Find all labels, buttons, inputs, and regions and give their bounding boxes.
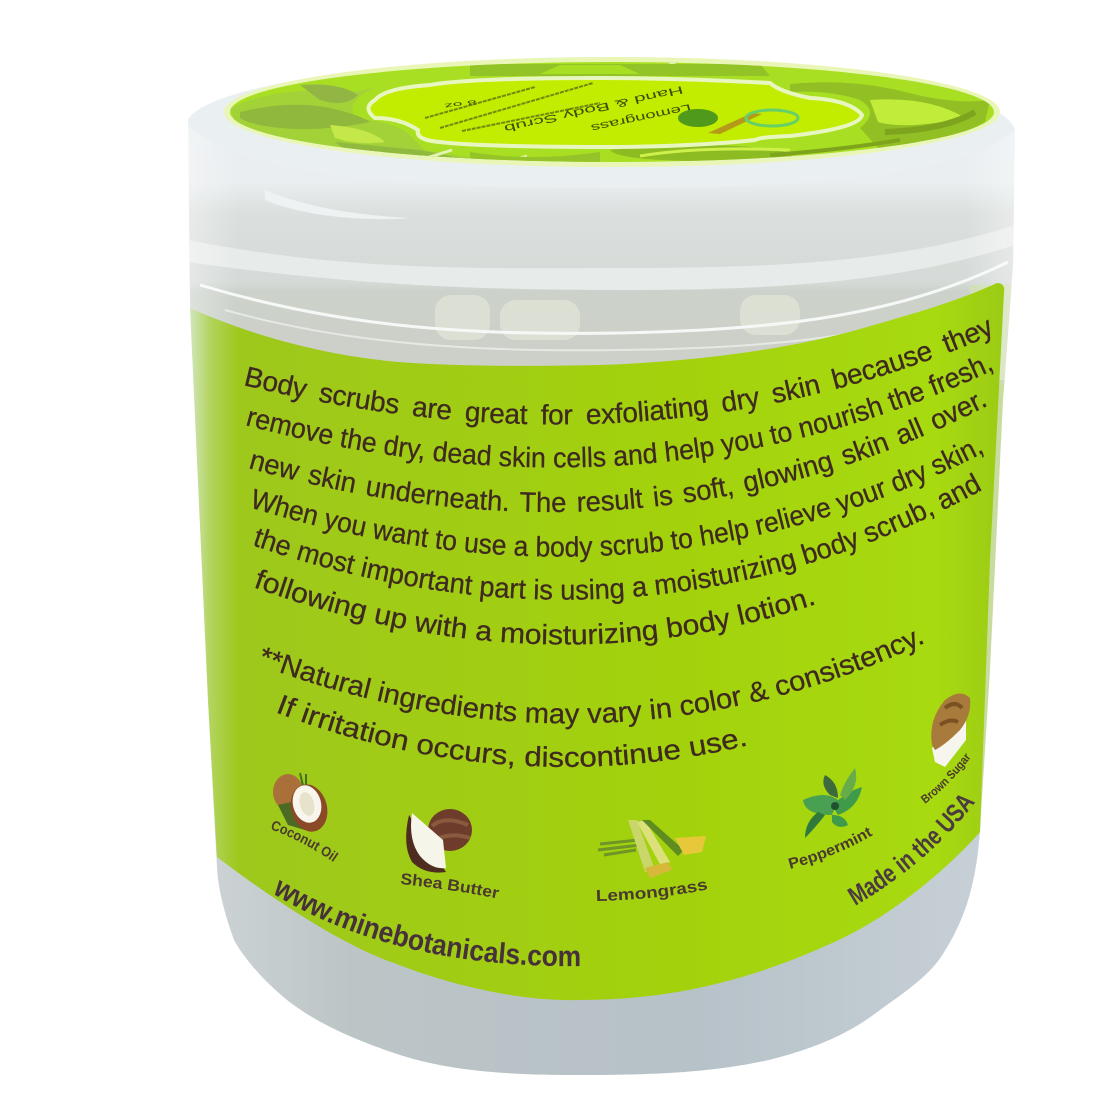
made in the USA: Made in the USA <box>847 795 976 906</box>
lid rim highlight <box>188 57 1015 188</box>
label body copy: When you want to use a body scrub to help relieve your dry skin, <box>254 444 984 562</box>
sticker text upside down: Hand & Body Scrub <box>503 84 685 135</box>
ingredient labels: Brown Sugar <box>920 753 970 804</box>
ingredient labels: Coconut Oil <box>272 821 339 862</box>
back label <box>190 283 1004 1000</box>
icon: shea butter <box>406 809 472 873</box>
jar contents <box>435 295 800 340</box>
label body copy: following up with a moisturizing body lotion. <box>255 570 814 646</box>
sticker logo <box>678 109 798 134</box>
icon: brown sugar <box>931 693 970 767</box>
lid lower step <box>188 225 1015 290</box>
ingredient labels: Lemongrass <box>597 882 707 901</box>
lid sticker <box>224 57 1000 170</box>
sticker centre panel <box>368 78 862 147</box>
sticker text upside down: 8 oz <box>443 99 478 110</box>
icon: peppermint <box>803 768 862 838</box>
label body copy <box>245 320 994 646</box>
label body copy: Body scrubs are great for exfoliating dry skin because they <box>245 320 990 428</box>
ingredient labels <box>272 753 970 901</box>
label body copy: the most important part is using a moisturizing body scrub, and <box>254 472 982 604</box>
icon: coconut <box>273 773 333 836</box>
sticker ornament <box>230 62 990 170</box>
sticker fine print <box>425 83 600 131</box>
ingredient labels: Peppermint <box>788 827 873 869</box>
ingredient labels: Shea Butter <box>400 874 500 898</box>
icon: lemongrass <box>598 820 706 878</box>
label caution note: **Natural ingredients may vary in color & consistency. <box>262 631 924 730</box>
website URL: www.minebotanicals.com <box>275 880 580 966</box>
jar product photo <box>188 57 1015 1075</box>
sticker text upside down: Lemongrass <box>590 102 693 134</box>
label caution note <box>262 631 924 769</box>
label body copy: remove the dry, dead skin cells and help you to nourish the fresh, <box>246 358 994 468</box>
label caution note: If irritation occurs, discontinue use. <box>278 695 746 769</box>
jar body <box>188 126 1015 1075</box>
label body copy: new skin underneath. The result is soft, glowing skin all over. <box>250 394 987 512</box>
